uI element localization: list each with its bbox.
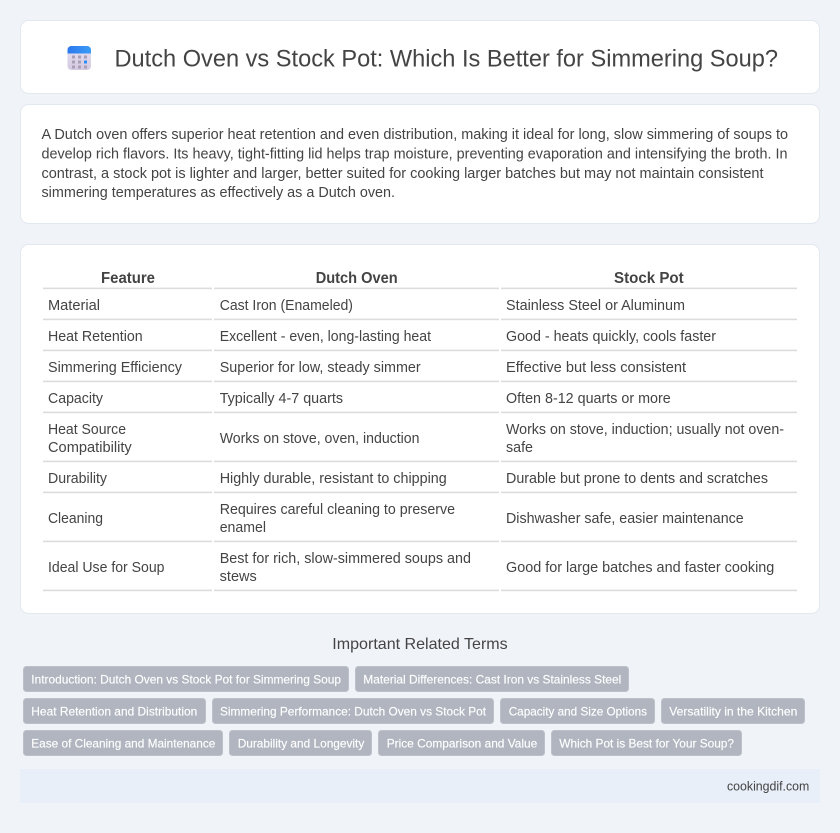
tag: material differences: Material Differences: Cast Iron vs Stainless Steel — [363, 672, 621, 686]
panel: introduction text — [20, 104, 820, 224]
table row: material: Cast Iron (Enameled) — [220, 298, 353, 314]
table row: simmering efficiency: Superior for low, steady simmer — [220, 360, 421, 376]
table row: heat source compatibility: safe — [506, 440, 533, 456]
footer bar — [20, 769, 820, 803]
tag: introduction: Introduction: Dutch Oven vs Stock Pot for Simmering Soup — [31, 672, 341, 686]
table header row: Feature — [101, 270, 155, 287]
table row: cleaning: Cleaning — [48, 511, 103, 527]
tag: durability — [230, 730, 372, 756]
table header row — [43, 270, 797, 289]
tag: versatility — [662, 698, 804, 724]
table row: heat retention: Excellent - even, long-lasting heat — [220, 329, 431, 345]
table header row: Dutch Oven — [316, 270, 398, 287]
table row: heat retention: Heat Retention — [48, 329, 143, 345]
related term tags — [24, 666, 804, 756]
text block: intro paragraph: develop rich flavors. Its heavy, tight-fitting lid helps trap moisture, preventing evaporation and intensifying the broth. In — [42, 146, 788, 162]
table row: capacity: Often 8-12 quarts or more — [506, 391, 671, 407]
table row: cleaning: Dishwasher safe, easier maintenance — [506, 511, 744, 527]
tag: introduction — [24, 666, 348, 692]
table row: ideal use for soup: Best for rich, slow-simmered soups and — [220, 551, 471, 567]
tag: which pot: Which Pot is Best for Your Soup? — [559, 736, 734, 750]
text block: intro paragraph: contrast, a stock pot is lighter and larger, better suited for cooking larger batches but may not maintain consistent — [42, 166, 764, 182]
table row: ideal use for soup: stews — [220, 569, 257, 585]
table row: material: Material — [48, 298, 100, 314]
icon: calendar — [68, 46, 91, 70]
tag: material differences — [356, 666, 628, 692]
table row: heat retention: Good - heats quickly, cools faster — [506, 329, 716, 345]
tag: simmering performance — [212, 698, 494, 724]
table row: heat source compatibility: Compatibility — [48, 440, 133, 456]
table row: capacity: Capacity — [48, 391, 104, 407]
table row: capacity: Typically 4-7 quarts — [220, 391, 343, 407]
table row: heat source compatibility: Works on stove, oven, induction — [220, 431, 420, 447]
panel: title header — [20, 20, 820, 94]
table row: heat source compatibility: Works on stove, induction; usually not oven- — [506, 422, 784, 438]
table row: durability — [43, 471, 797, 493]
table row: durability: Durability — [48, 471, 108, 487]
table row: durability: Durable but prone to dents and scratches — [506, 471, 768, 487]
table row: cleaning — [43, 502, 797, 542]
tag: ease of cleaning: Ease of Cleaning and Maintenance — [31, 736, 216, 750]
tag: capacity — [500, 698, 654, 724]
table row: ideal use for soup: Good for large batches and faster cooking — [506, 560, 774, 576]
table header row: Stock Pot — [614, 270, 684, 287]
table row: heat retention — [43, 329, 797, 351]
table row: heat source compatibility: Heat Source — [48, 422, 126, 438]
tag: capacity: Capacity and Size Options — [509, 704, 647, 718]
table row: material: Stainless Steel or Aluminum — [506, 298, 685, 314]
tag: durability: Durability and Longevity — [238, 736, 364, 750]
table row: cleaning: Requires careful cleaning to preserve — [220, 502, 455, 518]
panel: comparison table — [20, 244, 820, 614]
tag: heat retention: Heat Retention and Distribution — [31, 704, 197, 718]
text block: intro paragraph: A Dutch oven offers superior heat retention and even distribution, making it ideal for long, slow simmering of soups to — [42, 127, 788, 143]
title: Dutch Oven vs Stock Pot: Which Is Better for Simmering Soup? — [114, 46, 778, 72]
tag: versatility: Versatility in the Kitchen — [669, 704, 797, 718]
tag: ease of cleaning — [24, 730, 222, 756]
footer source text: cookingdif.com — [727, 780, 809, 794]
text block: intro paragraph: simmering temperatures as effectively as a Dutch oven. — [42, 185, 395, 201]
table row: simmering efficiency: Simmering Efficiency — [48, 360, 183, 376]
table row: simmering efficiency — [43, 360, 797, 382]
table row: capacity — [43, 391, 797, 413]
table row: simmering efficiency: Effective but less consistent — [506, 360, 686, 376]
table row: ideal use for soup — [43, 551, 797, 591]
table row: cleaning: enamel — [220, 520, 266, 536]
text block: intro paragraph — [42, 127, 788, 201]
table row: ideal use for soup: Ideal Use for Soup — [48, 560, 164, 576]
tag: price: Price Comparison and Value — [387, 736, 538, 750]
tag: heat retention — [24, 698, 206, 724]
table row: heat source compatibility — [43, 422, 797, 462]
table row: material — [43, 298, 797, 320]
table row: durability: Highly durable, resistant to chipping — [220, 471, 447, 487]
tag: which pot — [552, 730, 742, 756]
heading: related terms: Important Related Terms — [332, 636, 508, 653]
tag: simmering performance: Simmering Performance: Dutch Oven vs Stock Pot — [220, 704, 487, 718]
tag: price — [378, 730, 544, 756]
